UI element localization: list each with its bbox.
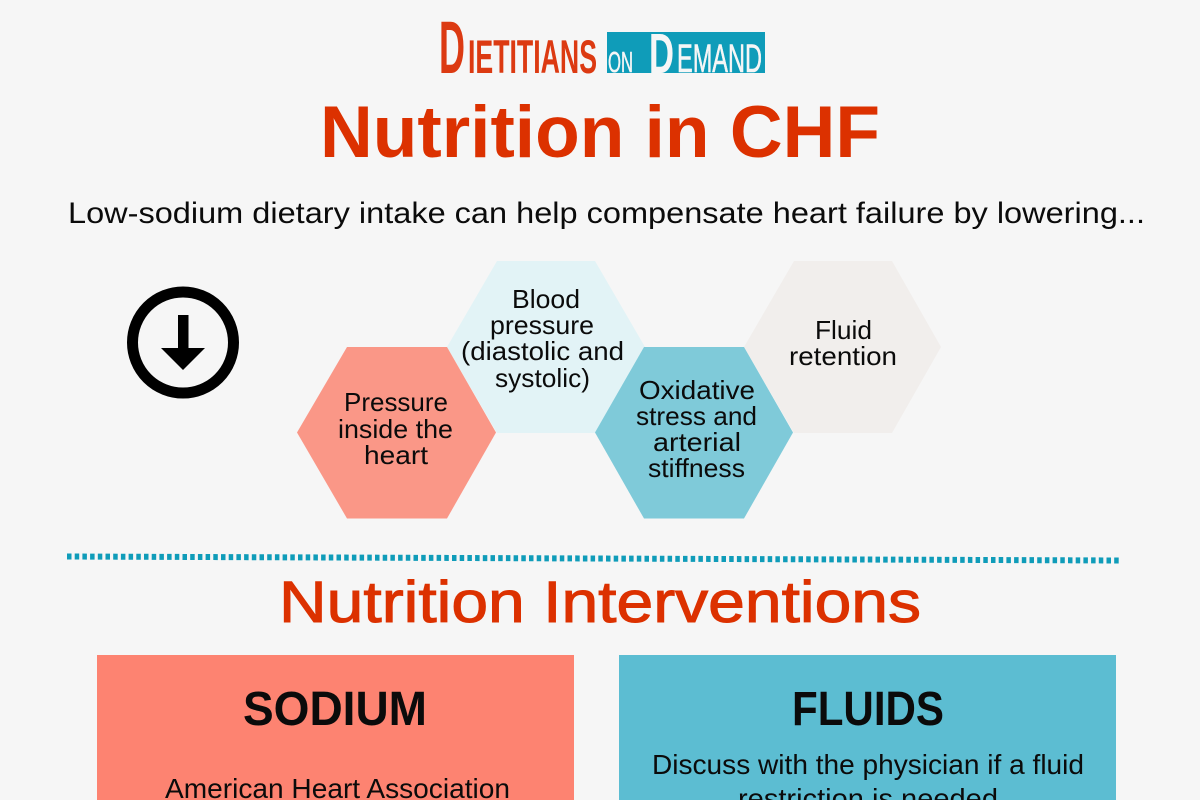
hexagon: oxidative stress and arterial stiffness <box>595 347 793 518</box>
panel: fluids <box>619 655 1116 800</box>
hexagon: blood pressure: (diastolic and <box>461 336 624 366</box>
hexagon: oxidative stress and arterial stiffness: Oxidative <box>639 375 755 405</box>
hexagon: pressure inside the heart <box>297 347 496 518</box>
hexagon: pressure inside the heart: inside the <box>338 414 453 444</box>
hexagon: blood pressure: systolic) <box>495 363 590 393</box>
panel: fluids: Discuss with the physician if a fluid <box>652 749 1084 780</box>
hexagon: fluid retention: Fluid <box>815 315 872 345</box>
heading: nutrition interventions: Nutrition Interventions <box>279 570 921 635</box>
hexagon: pressure inside the heart: heart <box>364 440 429 470</box>
title: Nutrition in CHF <box>320 92 880 173</box>
hexagon: oxidative stress and arterial stiffness: stress and <box>636 401 757 431</box>
panel: sodium: SODIUM <box>243 683 427 736</box>
logo: Dietitians on Demand: D <box>439 6 465 89</box>
hexagon: fluid retention <box>744 261 941 433</box>
icon: down arrow in circle <box>132 292 234 393</box>
hexagon: oxidative stress and arterial stiffness: arterial <box>653 427 741 457</box>
hexagon: blood pressure: Blood <box>512 284 580 314</box>
panel: fluids: FLUIDS <box>792 683 944 736</box>
hexagon: blood pressure <box>447 261 645 433</box>
hexagon: blood pressure: pressure <box>490 310 594 340</box>
logo: Dietitians on Demand: ON <box>608 47 633 79</box>
panel: sodium <box>97 655 574 800</box>
hexagon: pressure inside the heart: Pressure <box>344 387 448 417</box>
logo: Dietitians on Demand: D <box>649 22 674 86</box>
logo: Dietitians on Demand: EMAND <box>677 37 762 81</box>
logo: Dietitians on Demand <box>439 6 765 89</box>
hexagon: oxidative stress and arterial stiffness: stiffness <box>648 453 745 483</box>
logo: Dietitians on Demand: IETITIANS <box>468 30 597 83</box>
hexagon: fluid retention: retention <box>789 341 897 371</box>
intro text: Low-sodium dietary intake can help compensate heart failure by lowering... <box>68 197 1145 230</box>
